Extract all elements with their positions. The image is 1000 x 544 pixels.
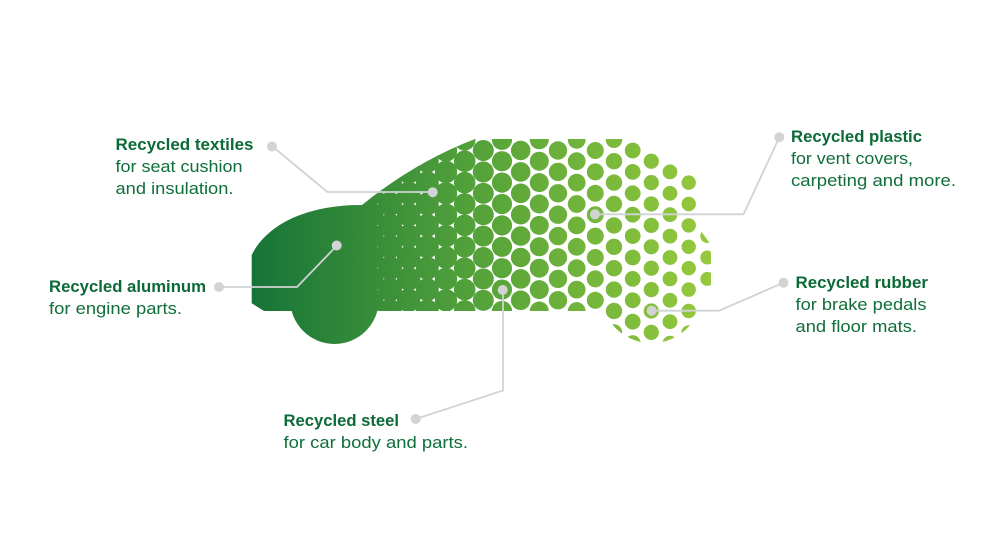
halftone dots body (353, 140, 707, 344)
car body solid front (252, 205, 362, 311)
callout: recycled rubber: Recycled rubber (796, 274, 929, 292)
callout: recycled aluminum (49, 240, 342, 318)
callout: recycled plastic (590, 128, 956, 219)
callout: recycled aluminum: Recycled aluminum (49, 278, 206, 296)
callout: recycled plastic: Recycled plastic (791, 128, 922, 146)
callout: recycled rubber: for brake pedals (796, 296, 926, 314)
callout: recycled plastic: carpeting and more. (791, 172, 956, 190)
callout: recycled textiles: Recycled textiles (116, 136, 254, 154)
callout: recycled textiles (116, 136, 438, 198)
callout: recycled aluminum: for engine parts. (49, 300, 182, 318)
callout: recycled rubber: and floor mats. (796, 318, 917, 336)
callout: recycled textiles: and insulation. (116, 180, 234, 198)
callout: recycled plastic: for vent covers, (791, 150, 913, 168)
callout: recycled steel: for car body and parts. (284, 434, 468, 452)
car graphic (252, 140, 707, 344)
callout: recycled steel (284, 285, 508, 452)
callout: recycled textiles: for seat cushion (116, 158, 242, 176)
callout: recycled rubber (647, 274, 929, 336)
callout: recycled steel: Recycled steel (284, 412, 399, 430)
front wheel (290, 255, 379, 344)
